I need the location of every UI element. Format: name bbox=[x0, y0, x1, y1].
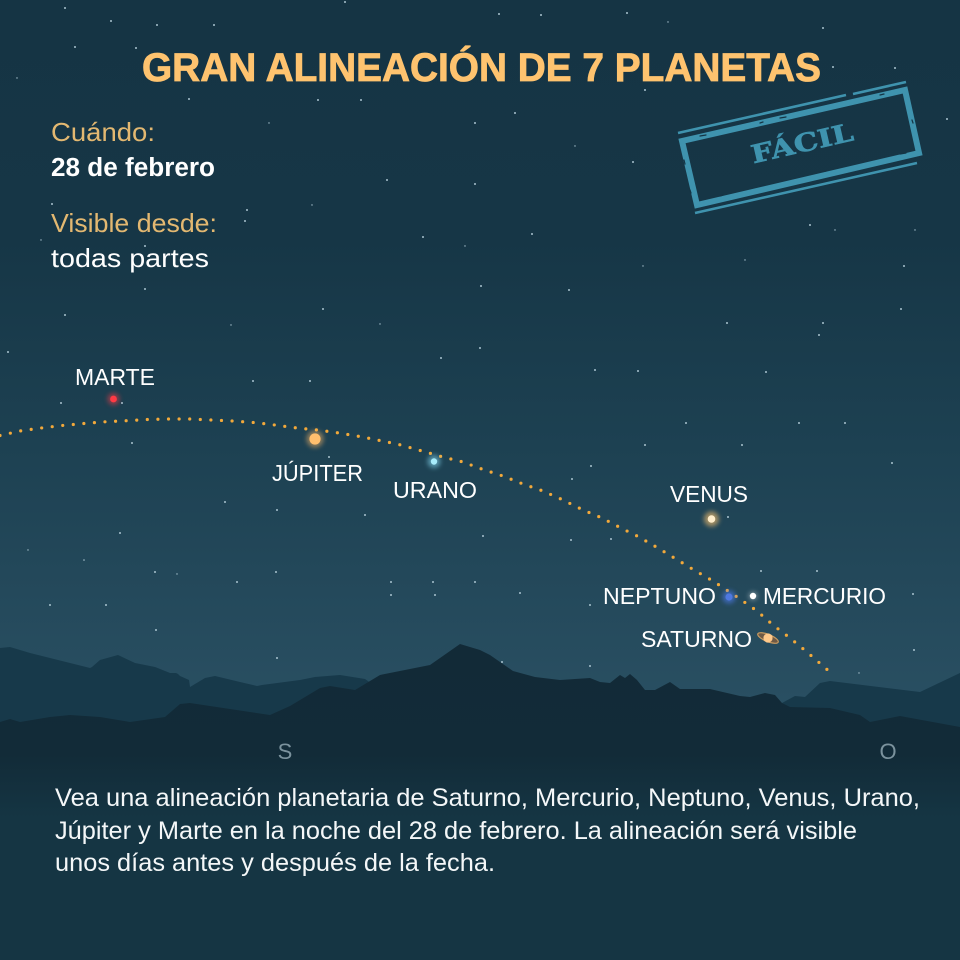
sky background bbox=[0, 0, 960, 720]
mountains: back range bbox=[0, 647, 960, 760]
planet: Mercurio bbox=[748, 592, 758, 600]
orbit: dotted ecliptic arc bbox=[0, 419, 831, 673]
stamp: difficulty: FÁCIL bbox=[748, 118, 857, 169]
planet: Urano bbox=[428, 455, 440, 468]
label: Júpiter: JÚPITER bbox=[272, 460, 363, 486]
label: Saturno: SATURNO bbox=[641, 626, 752, 652]
stamp: difficulty bbox=[678, 82, 919, 213]
info: date: 28 de febrero bbox=[51, 154, 215, 182]
label: Urano: URANO bbox=[393, 477, 477, 503]
info: visible from label: Visible desde: bbox=[51, 208, 217, 238]
stars bbox=[7, 1, 948, 674]
label: Neptuno: NEPTUNO bbox=[603, 583, 716, 609]
description text: Vea una alineación planetaria de Saturno, Mercurio, Neptuno, Venus, Urano, bbox=[55, 784, 920, 812]
title: GRAN ALINEACIÓN DE 7 PLANETAS bbox=[142, 46, 821, 90]
planet: Saturno bbox=[756, 631, 780, 645]
planet: Neptuno bbox=[722, 590, 736, 604]
description text bbox=[55, 784, 920, 877]
description text: unos días antes y después de la fecha. bbox=[55, 849, 495, 877]
label: Venus: VENUS bbox=[670, 481, 748, 507]
label: Marte: MARTE bbox=[75, 364, 155, 390]
direction: west: O bbox=[879, 739, 897, 764]
direction: south: S bbox=[278, 739, 292, 764]
mountains: front range bbox=[0, 644, 960, 960]
planet: Marte bbox=[108, 393, 120, 405]
description text: Júpiter y Marte en la noche del 28 de febrero. La alineación será visible bbox=[55, 817, 857, 845]
info: when label: Cuándo: bbox=[51, 117, 155, 147]
info: visible from value: todas partes bbox=[51, 243, 209, 273]
label: Mercurio: MERCURIO bbox=[763, 583, 886, 609]
planet: Júpiter bbox=[306, 430, 324, 448]
planet: Venus bbox=[704, 512, 719, 526]
